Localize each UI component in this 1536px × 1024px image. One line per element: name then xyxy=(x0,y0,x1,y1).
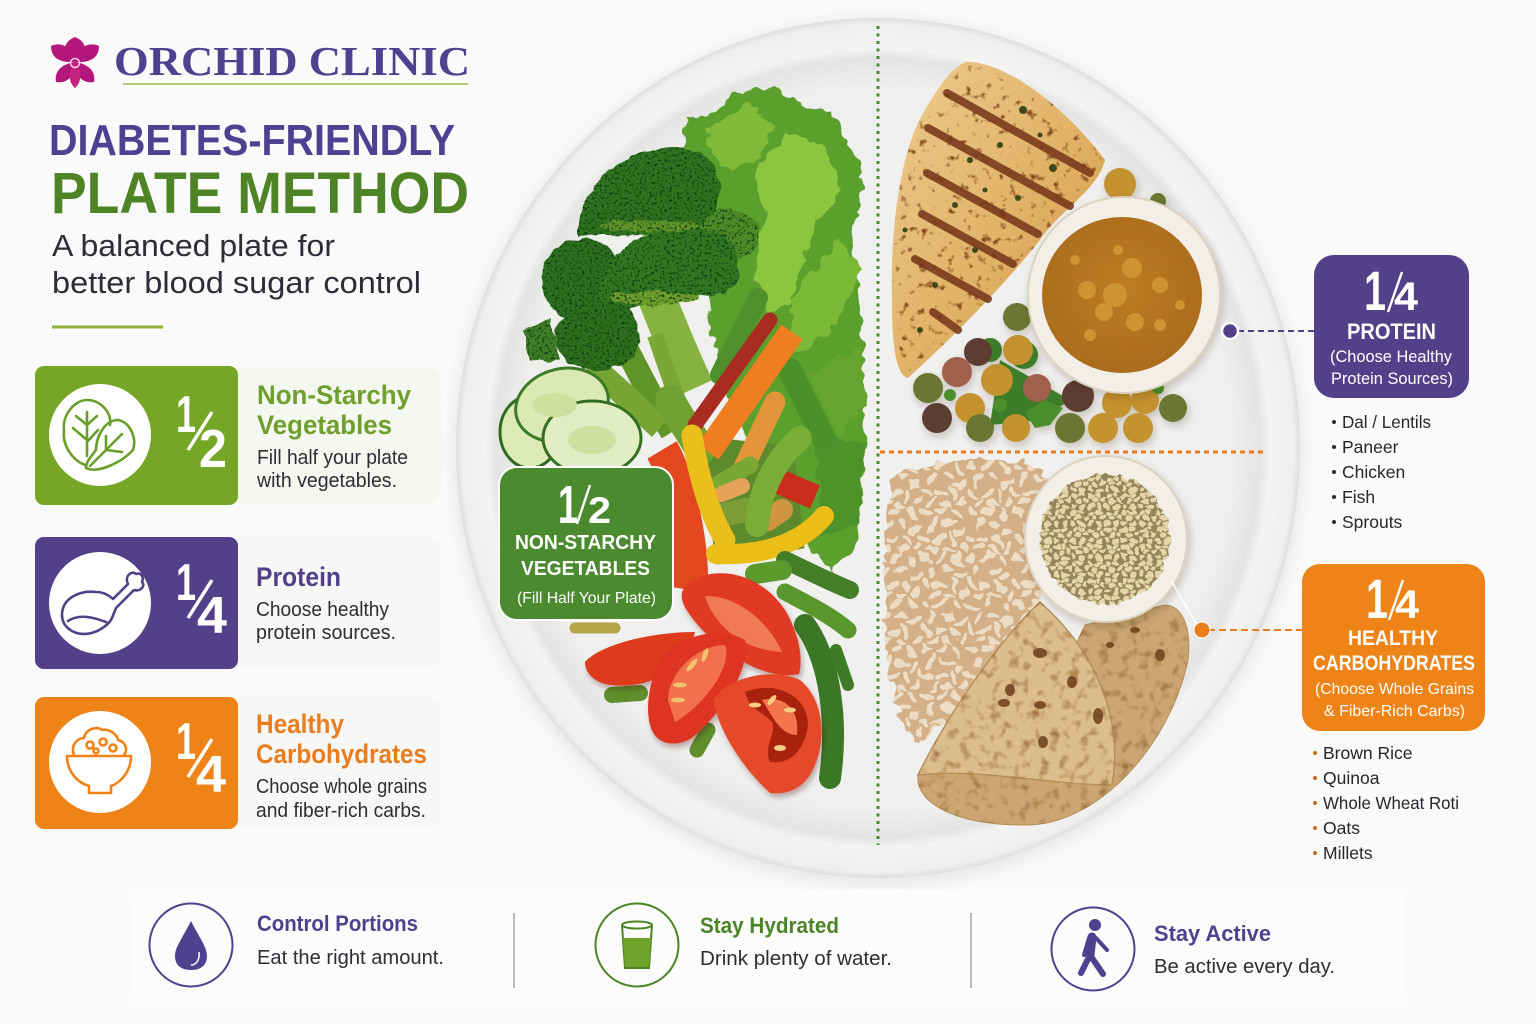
subtitle: A balanced plate for xyxy=(52,228,335,263)
protein: chickpeas and sprouts xyxy=(913,168,1187,443)
panel: non-starchy vegetables xyxy=(35,366,441,505)
icon: glass of water xyxy=(596,904,678,986)
list: protein sources: Paneer xyxy=(1342,437,1399,457)
title xyxy=(49,116,469,226)
carbs: quinoa bowl xyxy=(1025,456,1187,622)
text: vegetables: Fill half your plate xyxy=(257,447,408,469)
callout: protein xyxy=(1222,255,1469,398)
text: carbohydrates: Choose whole grains xyxy=(256,776,427,798)
callout: healthy carbohydrates xyxy=(1172,564,1485,731)
title: DIABETES-FRIENDLY xyxy=(49,116,455,165)
panel: healthy carbohydrates xyxy=(35,697,441,829)
protein: dal bowl xyxy=(1028,197,1220,393)
text: carbohydrates: Carbohydrates xyxy=(256,739,427,769)
text: protein xyxy=(256,562,396,644)
text: vegetables: with vegetables. xyxy=(256,470,397,492)
text: vegetables xyxy=(256,380,411,492)
icon: grain bowl xyxy=(49,711,151,813)
text: vegetables: Vegetables xyxy=(257,410,392,440)
tip: stay hydrated: Drink plenty of water. xyxy=(700,948,892,970)
icon: lettuce leaves xyxy=(49,384,151,486)
clinic name: ORCHID CLINIC xyxy=(114,38,470,84)
list: carbohydrate sources: Millets xyxy=(1323,843,1373,863)
subtitle: better blood sugar control xyxy=(52,265,421,300)
logo xyxy=(51,37,470,88)
fraction 1/4: 1 xyxy=(176,554,196,612)
callout: protein: Protein Sources) xyxy=(1331,370,1453,388)
icon: orchid flower xyxy=(51,37,99,88)
list: protein sources: Chicken xyxy=(1342,462,1405,482)
fraction 1/2: 2 xyxy=(199,419,227,479)
list: protein sources: Sprouts xyxy=(1342,512,1403,532)
tip: control portions xyxy=(150,904,444,986)
vegetables: broccoli stalks xyxy=(590,220,695,432)
tip: stay active xyxy=(1052,908,1335,990)
callout: non-starchy vegetables: VEGETABLES xyxy=(521,558,650,580)
tip: stay active: Be active every day. xyxy=(1154,956,1335,978)
tip: stay hydrated: Stay Hydrated xyxy=(700,913,839,938)
callout: protein: PROTEIN xyxy=(1347,319,1436,344)
text: protein: Protein xyxy=(256,562,341,592)
icon: water drop xyxy=(150,904,232,986)
subtitle xyxy=(52,228,421,300)
list: carbohydrate sources: Quinoa xyxy=(1323,768,1380,788)
list: carbohydrate sources: Brown Rice xyxy=(1323,743,1412,763)
fraction 1/4: 4 xyxy=(197,587,227,645)
callout: healthy carbohydrates: HEALTHY xyxy=(1348,627,1438,650)
text: carbohydrates xyxy=(256,709,427,822)
horizontal dashed divider xyxy=(880,450,1263,454)
vegetables: cucumber slices xyxy=(500,358,641,475)
callout: protein: 1 xyxy=(1364,259,1386,322)
callout: healthy carbohydrates: 1 xyxy=(1366,567,1388,630)
list: protein sources: Fish xyxy=(1342,487,1375,507)
fraction 1/4: 4 xyxy=(196,746,226,804)
tip: stay hydrated xyxy=(596,904,892,986)
connector xyxy=(1222,323,1314,339)
fraction 1/2: 1 xyxy=(176,386,196,444)
list: protein sources xyxy=(1332,412,1431,532)
text: carbohydrates: Healthy xyxy=(256,709,344,739)
callout: protein: (Choose Healthy xyxy=(1330,348,1453,366)
list: carbohydrate sources xyxy=(1313,743,1459,863)
icon: chicken leg xyxy=(49,552,151,654)
tip: control portions: Control Portions xyxy=(257,911,418,936)
text: protein: Choose healthy xyxy=(256,599,389,621)
fraction 1/2 xyxy=(176,386,227,479)
callout: protein: 4 xyxy=(1394,275,1419,319)
list: carbohydrate sources: Whole Wheat Roti xyxy=(1323,793,1459,813)
icon: walking person xyxy=(1052,908,1134,990)
text: protein: protein sources. xyxy=(256,622,396,644)
text: carbohydrates: and fiber-rich carbs. xyxy=(256,800,426,822)
carbs: brown rice xyxy=(884,460,1050,742)
text: vegetables: Non-Starchy xyxy=(257,380,411,410)
title: PLATE METHOD xyxy=(51,161,469,226)
dotted divider: vertical xyxy=(876,26,880,845)
tip: control portions: Eat the right amount. xyxy=(257,947,444,969)
connector xyxy=(1172,582,1302,638)
list: carbohydrate sources: Oats xyxy=(1323,818,1360,838)
carbs: whole wheat roti xyxy=(918,602,1189,825)
fraction 1/4: 1 xyxy=(176,713,196,771)
callout: non-starchy vegetables: 1 xyxy=(558,475,578,535)
panel: protein xyxy=(35,537,441,669)
fraction 1/4 xyxy=(176,554,227,645)
fraction 1/4 xyxy=(176,713,226,804)
panel: tips strip xyxy=(130,890,1406,1004)
callout: non-starchy vegetables: NON-STARCHY xyxy=(515,532,657,554)
vegetables: broccoli florets xyxy=(523,147,760,371)
callout: healthy carbohydrates: & Fiber-Rich Carbs) xyxy=(1324,703,1465,720)
callout: healthy carbohydrates: 4 xyxy=(1395,583,1420,627)
protein: grilled chicken xyxy=(892,62,1105,378)
vegetables: lettuce xyxy=(683,88,866,572)
plate xyxy=(456,18,1300,878)
callout: healthy carbohydrates: CARBOHYDRATES xyxy=(1313,652,1475,675)
callout: healthy carbohydrates: (Choose Whole Grains xyxy=(1315,681,1474,698)
vegetables: tomatoes xyxy=(585,573,821,793)
callout: non-starchy vegetables xyxy=(499,467,673,620)
callout: non-starchy vegetables: (Fill Half Your Plate) xyxy=(517,590,656,607)
tip: stay active: Stay Active xyxy=(1154,921,1271,946)
vegetables: mixed peppers and beans xyxy=(575,298,850,778)
list: protein sources: Dal / Lentils xyxy=(1342,412,1431,432)
callout: non-starchy vegetables: 2 xyxy=(588,490,611,531)
